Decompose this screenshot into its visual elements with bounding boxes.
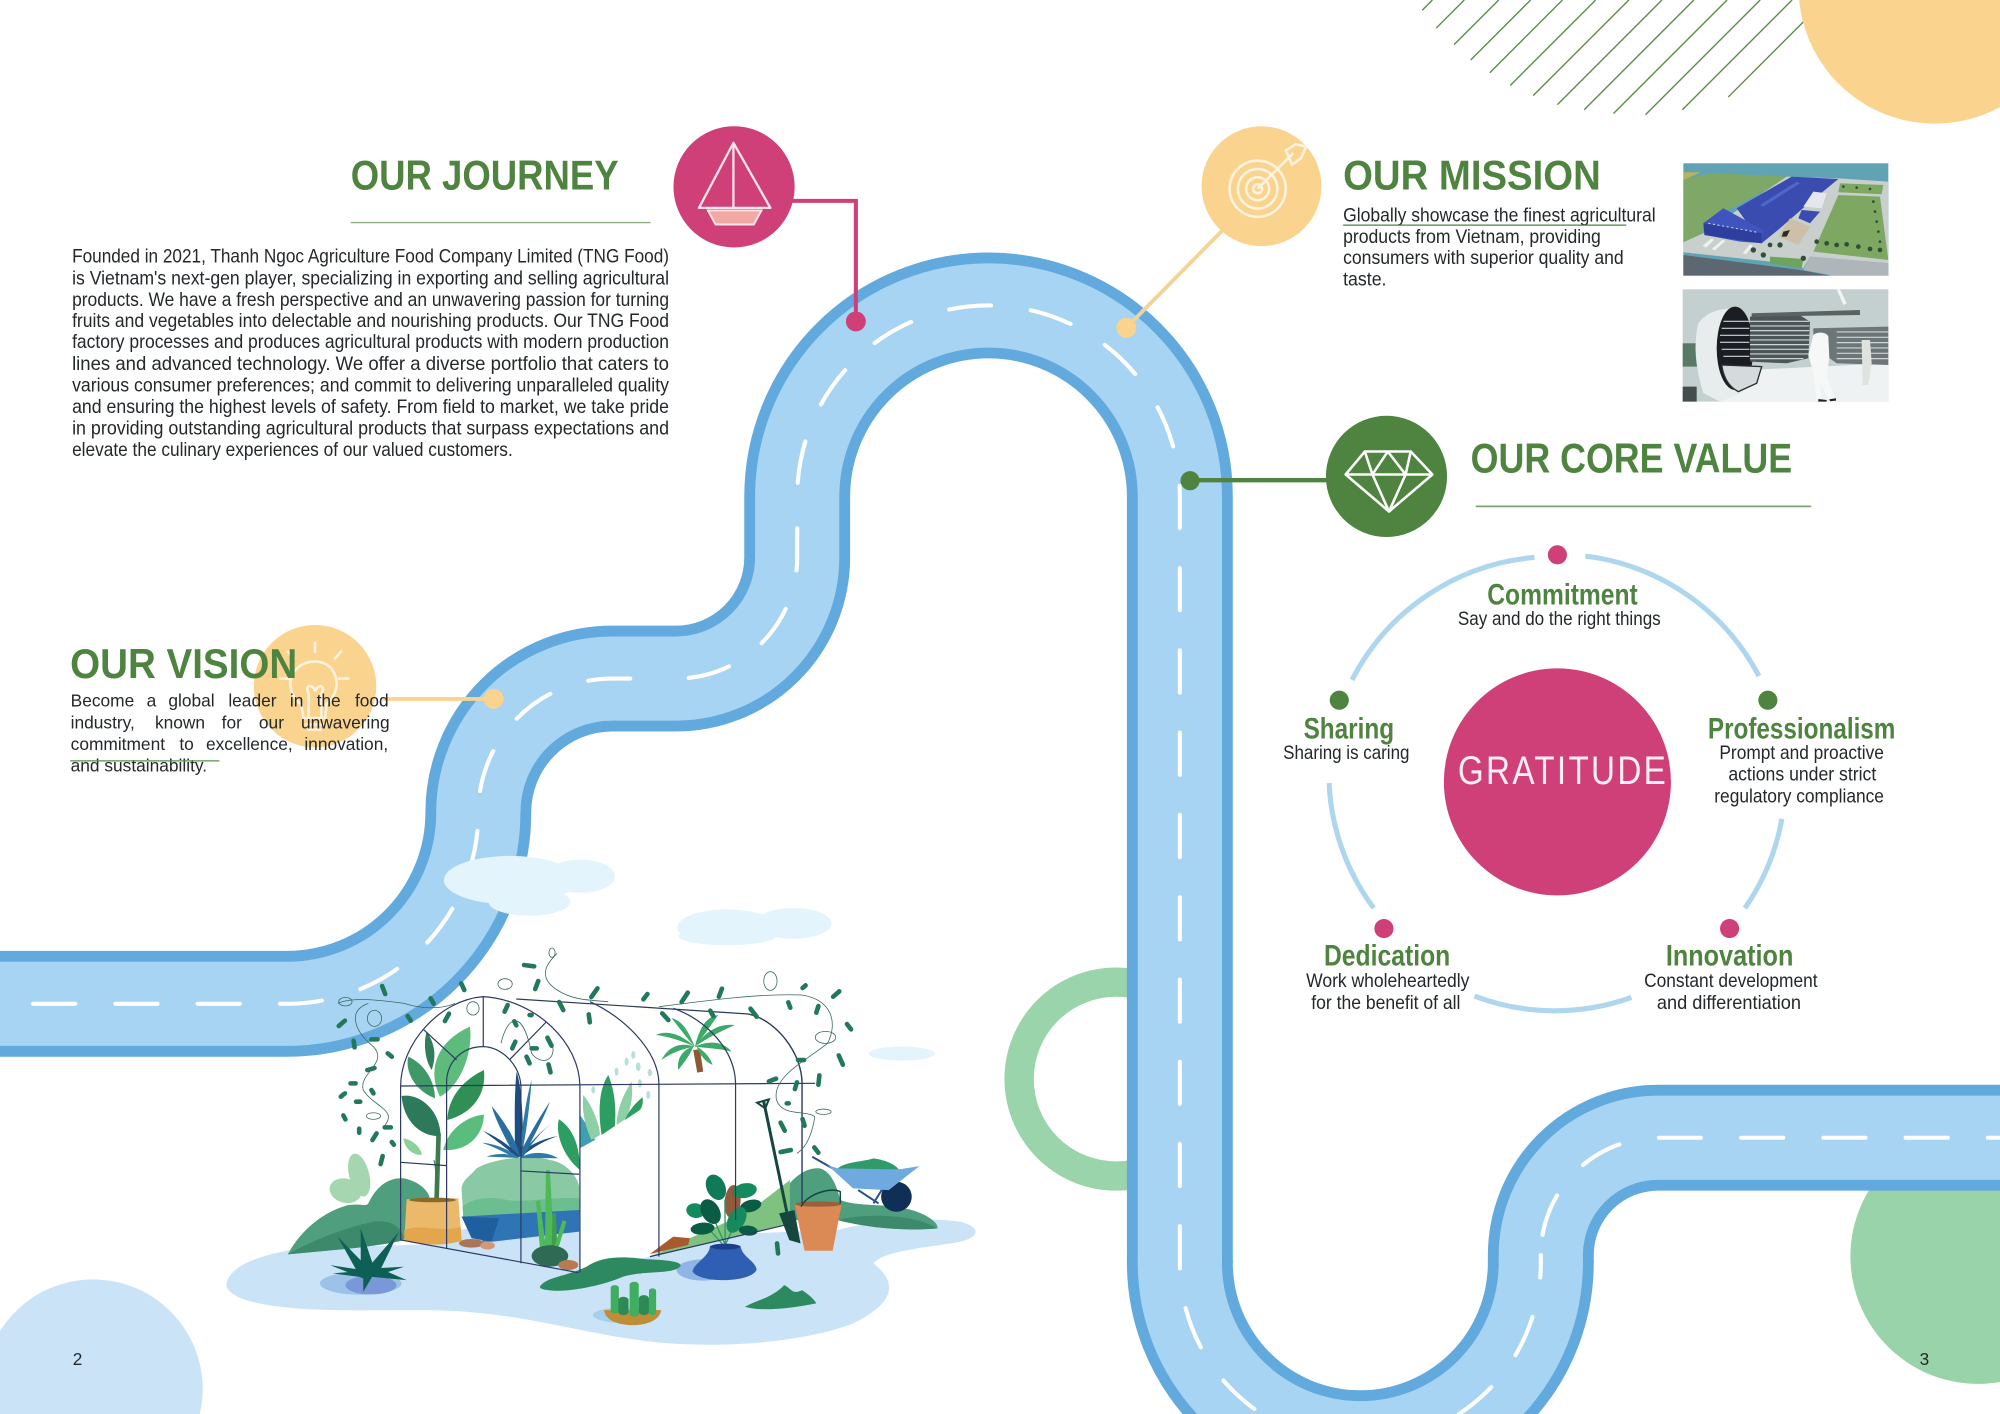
vision paragraph: for: [222, 712, 242, 732]
heading: our core value: OUR CORE VALUE: [1471, 435, 1792, 482]
heading: our journey: OUR JOURNEY: [351, 151, 619, 198]
value: innovation: Innovation: [1666, 940, 1793, 973]
value: professionalism: [1708, 713, 1895, 807]
value: professionalism: Prompt and proactive: [1719, 742, 1884, 764]
decorative light blue circle bottom left: [0, 1279, 203, 1414]
vision paragraph: known: [155, 712, 205, 732]
panel: our core value: [1180, 416, 1895, 1014]
connector: core value: [1180, 471, 1329, 490]
vision paragraph: Become: [71, 691, 134, 711]
value: innovation: Constant development: [1644, 970, 1818, 992]
greenhouse illustration: [226, 948, 976, 1345]
value: commitment: [1458, 579, 1661, 630]
ground and back shrubs: [226, 1153, 976, 1345]
vision paragraph: the: [317, 691, 341, 711]
vines: [338, 948, 836, 1153]
value: innovation: [1644, 940, 1818, 1014]
orange bucket: [794, 1190, 842, 1251]
center circle: gratitude: GRATITUDE: [1458, 748, 1666, 792]
journey paragraph: is Vietnam's next-gen player, specializing in exporting and selling agricultural: [72, 267, 669, 289]
center circle: gratitude: [1444, 668, 1671, 895]
photo: factory aerial view: [1683, 163, 1888, 276]
front plants, tools and vines: [320, 948, 851, 1325]
blue spiky plant: [482, 1072, 558, 1158]
vine leaves: [339, 965, 851, 1253]
icon: sailboat: [673, 126, 795, 247]
value: dedication: [1306, 940, 1470, 1014]
heading: our vision: OUR VISION: [70, 640, 297, 687]
value: sharing: Sharing: [1304, 713, 1394, 746]
value: professionalism: actions under strict: [1728, 764, 1877, 786]
journey paragraph: and ensuring the highest levels of safety. From field to market, we take pride: [72, 396, 669, 418]
dark spiky plant: [320, 1228, 407, 1295]
mission paragraph: taste.: [1343, 269, 1386, 291]
icon: diamond: [1326, 416, 1447, 537]
panel: our journey: [72, 126, 866, 461]
page number right: 3: [1920, 1349, 1929, 1369]
vision paragraph: leader: [228, 691, 277, 711]
value: professionalism: Professionalism: [1708, 713, 1895, 746]
greenhouse frame: [401, 997, 815, 1273]
panel: our mission: [1116, 126, 1888, 402]
vision paragraph: to: [179, 734, 194, 754]
vision paragraph: our: [259, 712, 284, 732]
decorative green ring: [1019, 982, 1213, 1176]
journey paragraph: factory processes and produces agricultural products with modern production: [72, 331, 669, 353]
mission paragraph: [1343, 204, 1656, 291]
connector: vision: [383, 689, 504, 709]
value: sharing: Sharing is caring: [1283, 742, 1409, 764]
small front bush: [745, 1285, 816, 1309]
page number left: 2: [73, 1349, 82, 1369]
value: innovation: and differentiation: [1657, 992, 1801, 1014]
value: commitment: Commitment: [1487, 579, 1638, 612]
connector: mission: [1116, 228, 1224, 338]
banana leaves: [558, 1075, 643, 1170]
far end frame arch: [748, 1014, 802, 1203]
ring dots: [1330, 545, 1777, 938]
value: sharing: [1283, 713, 1409, 764]
mission paragraph: products from Vietnam, providing: [1343, 226, 1601, 248]
vision paragraph: commitment: [71, 734, 165, 754]
heading: our mission: OUR MISSION: [1343, 151, 1601, 198]
icon: light bulb: [254, 625, 376, 747]
value: commitment: Say and do the right things: [1458, 608, 1661, 630]
vision paragraph: unwavering: [301, 712, 390, 732]
icon: target: [1202, 126, 1321, 246]
palm: [656, 1015, 735, 1073]
vision paragraph: and sustainability.: [71, 756, 207, 776]
journey paragraph: [72, 246, 669, 461]
decorative hatch lines top right: [1422, 0, 1825, 115]
panel: our vision: [70, 625, 504, 776]
winding road: [0, 305, 2000, 1414]
photo: freeze dryer machine: [1683, 289, 1888, 402]
value: dedication: Dedication: [1324, 940, 1450, 973]
value: dedication: for the benefit of all: [1311, 992, 1460, 1014]
vision paragraph: innovation,: [304, 734, 388, 754]
journey paragraph: in providing outstanding agricultural products that surpass expectations and: [72, 417, 669, 439]
journey paragraph: fruits and vegetables into delectable and nourishing products. Our TNG Food: [72, 310, 669, 332]
journey paragraph: products. We have a fresh perspective and an unwavering passion for turning: [72, 289, 669, 311]
journey paragraph: elevate the culinary experiences of our valued customers.: [72, 439, 513, 461]
journey paragraph: Founded in 2021, Thanh Ngoc Agriculture Food Company Limited (TNG Food): [72, 246, 669, 268]
clouds: [444, 856, 935, 1061]
mission paragraph: consumers with superior quality and: [1343, 247, 1624, 269]
decorative green circle bottom right: [1850, 1129, 2000, 1384]
aloe in pot: [532, 1170, 568, 1267]
values ring: [1329, 556, 1782, 1011]
mission paragraph: Globally showcase the finest agricultural: [1343, 204, 1656, 226]
vision paragraph: global: [168, 691, 215, 711]
greenhouse center with plants: [401, 997, 815, 1291]
vision paragraph: in: [290, 691, 303, 711]
shovel: [757, 1099, 801, 1243]
value: professionalism: regulatory compliance: [1714, 785, 1884, 807]
rubber plant in blue vase: [677, 1171, 763, 1281]
decorative peach circle top right: [1799, 0, 2000, 124]
vision paragraph: excellence,: [206, 734, 293, 754]
tall potted plant: [402, 1027, 484, 1245]
pale hanging leaves: [591, 1051, 652, 1099]
cactus bowl: [593, 1282, 661, 1325]
vision paragraph: a: [147, 691, 157, 711]
connector: journey: [791, 201, 866, 331]
mound bush with blue base: [462, 1157, 579, 1242]
vision paragraph: food: [355, 691, 389, 711]
journey paragraph: various consumer preferences; and commit to delivering unparalleled quality: [72, 375, 669, 397]
value: dedication: Work wholeheartedly: [1306, 970, 1470, 992]
journey paragraph: lines and advanced technology. We offer a diverse portfolio that caters to: [72, 353, 669, 375]
front wave bush: [540, 1257, 681, 1291]
rocks: [459, 1239, 578, 1270]
vision paragraph: industry,: [71, 712, 135, 732]
